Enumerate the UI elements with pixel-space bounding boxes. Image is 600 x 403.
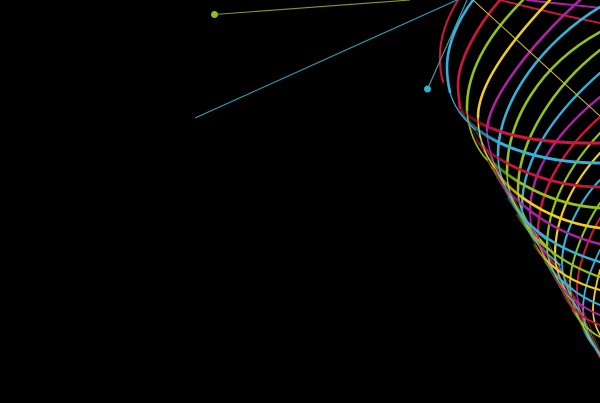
cyan leader line, long — [195, 0, 457, 118]
funnel wireframe — [440, 0, 600, 365]
funnel vertical ribs, upper — [440, 0, 600, 310]
funnel ribs, fine tails toward apex — [460, 108, 600, 365]
funnel back rim — [500, 0, 600, 23]
yellow leader line — [473, 0, 600, 116]
funnel ribs, lower bends — [450, 92, 600, 357]
funnel horizontal rings — [460, 108, 600, 353]
cyan leader line with dot — [424, 0, 467, 92]
green leader line with dot — [211, 0, 410, 18]
